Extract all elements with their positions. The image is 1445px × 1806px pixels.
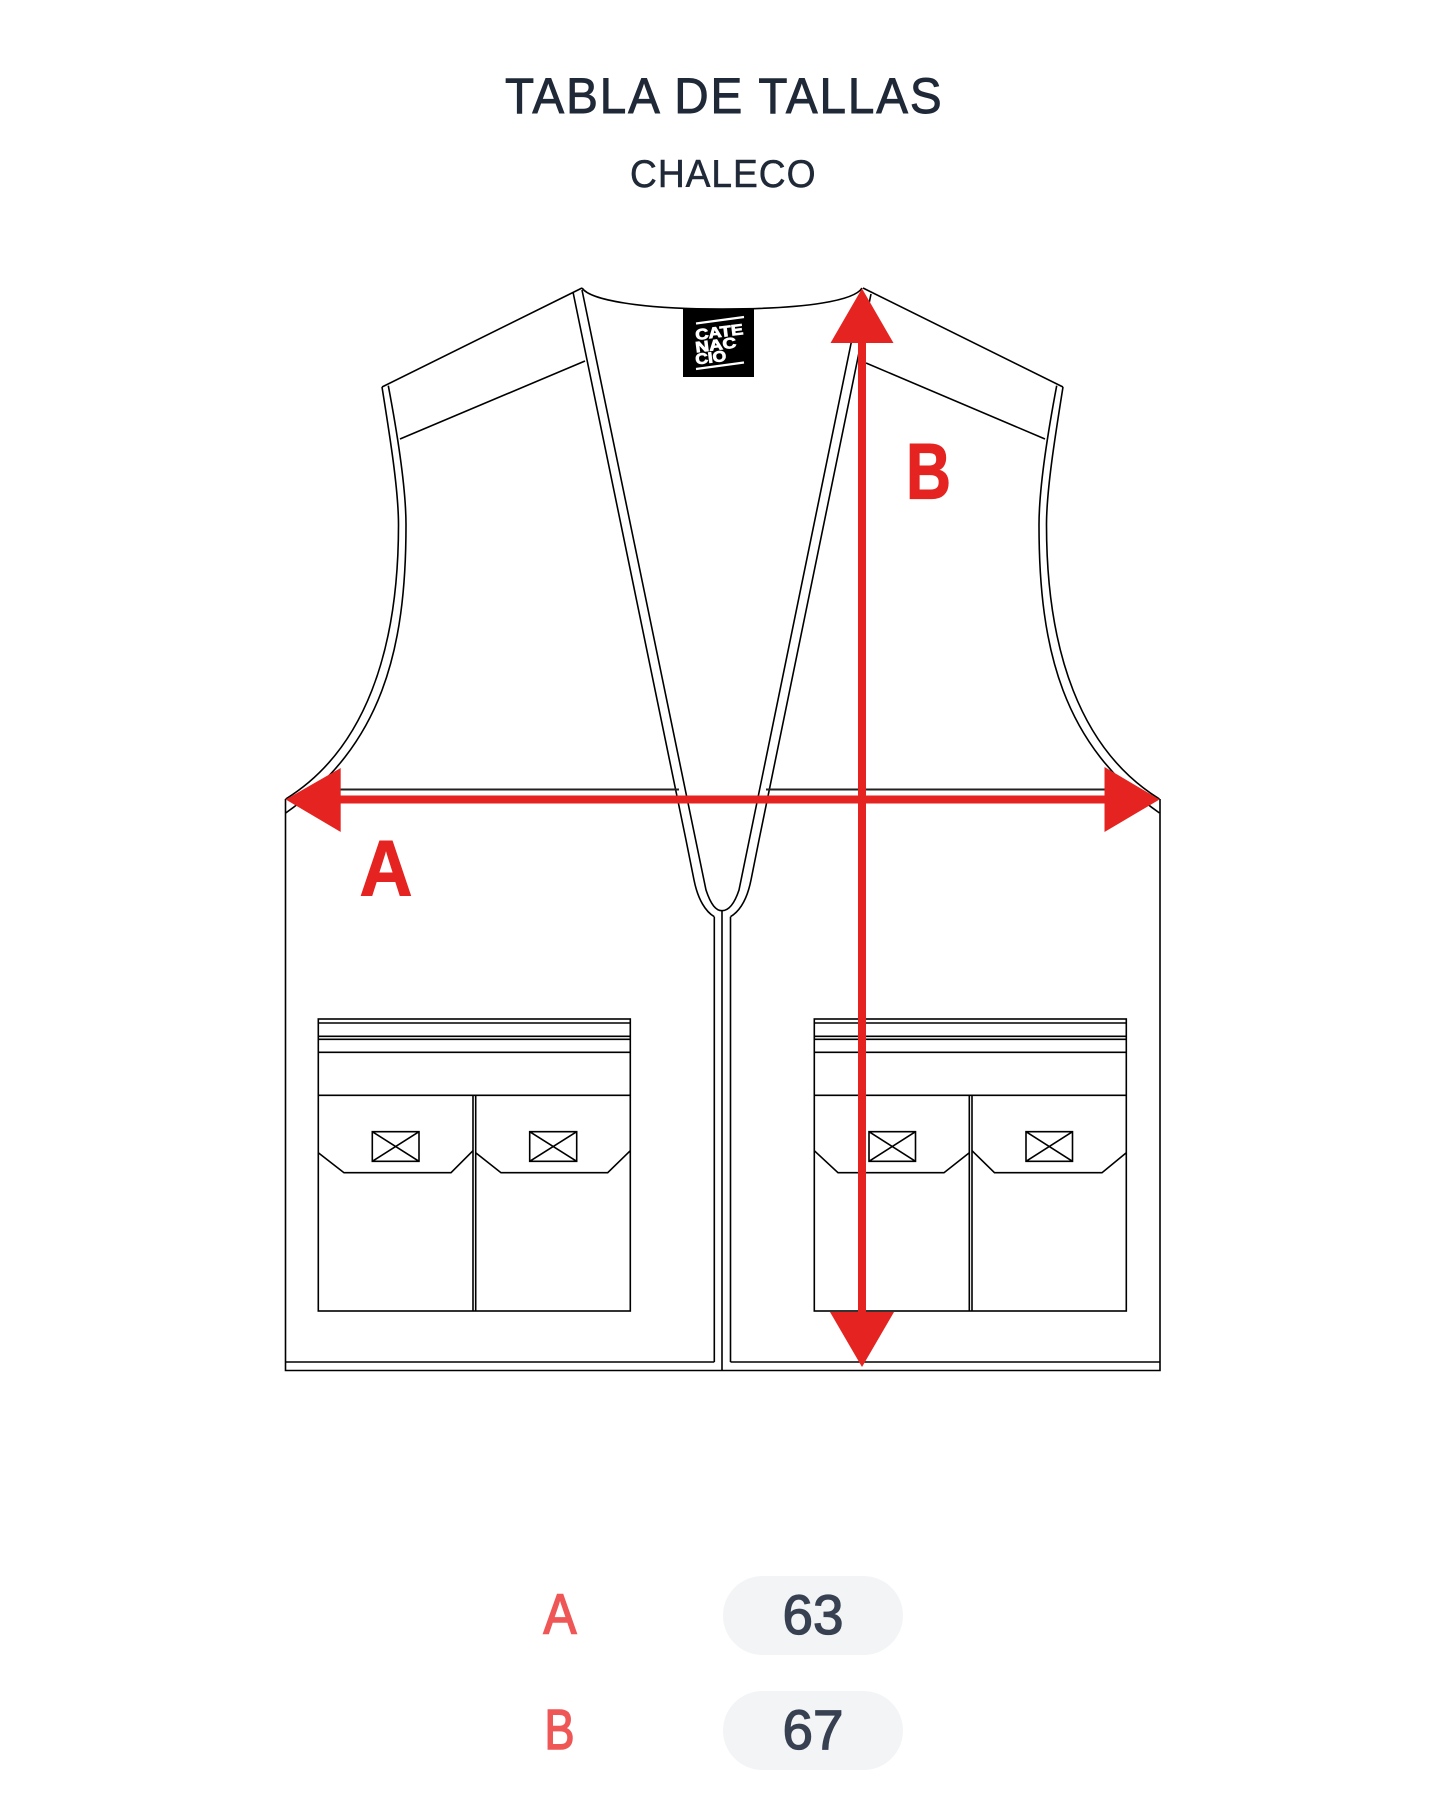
neck label logo: CATE xyxy=(694,321,744,344)
neck label logo: CIO xyxy=(694,348,728,368)
vest neckline xyxy=(582,288,862,309)
title: TABLA DE TALLAS xyxy=(505,67,944,124)
left pocket xyxy=(318,1019,630,1311)
measure row A xyxy=(544,1576,903,1655)
value pill 63: 63 xyxy=(782,1583,844,1646)
vest left armhole xyxy=(286,386,406,813)
subtitle: CHALECO xyxy=(630,153,816,196)
value pill 67: 67 xyxy=(782,1698,844,1761)
label A: A xyxy=(544,1582,576,1646)
value pill 63 xyxy=(723,1576,903,1655)
letter A on diagram: A xyxy=(360,824,412,912)
vest shoulders and yokes xyxy=(382,288,1063,439)
letter B on diagram: B xyxy=(906,426,951,516)
vest front placket xyxy=(714,911,730,1370)
vest body outline xyxy=(286,790,1160,1370)
neck label logo: NAC xyxy=(694,335,737,356)
arrow A: horizontal width measure xyxy=(286,767,1160,832)
neck label logo xyxy=(683,309,754,377)
label B: B xyxy=(544,1698,574,1762)
right pocket xyxy=(814,1019,1126,1311)
value pill 67 xyxy=(723,1691,903,1770)
vest line drawing xyxy=(286,288,1160,1370)
vest right armhole xyxy=(1039,386,1160,813)
vest lapels xyxy=(573,290,871,917)
measure row B xyxy=(544,1691,903,1770)
arrow B: vertical length measure xyxy=(830,288,894,1367)
